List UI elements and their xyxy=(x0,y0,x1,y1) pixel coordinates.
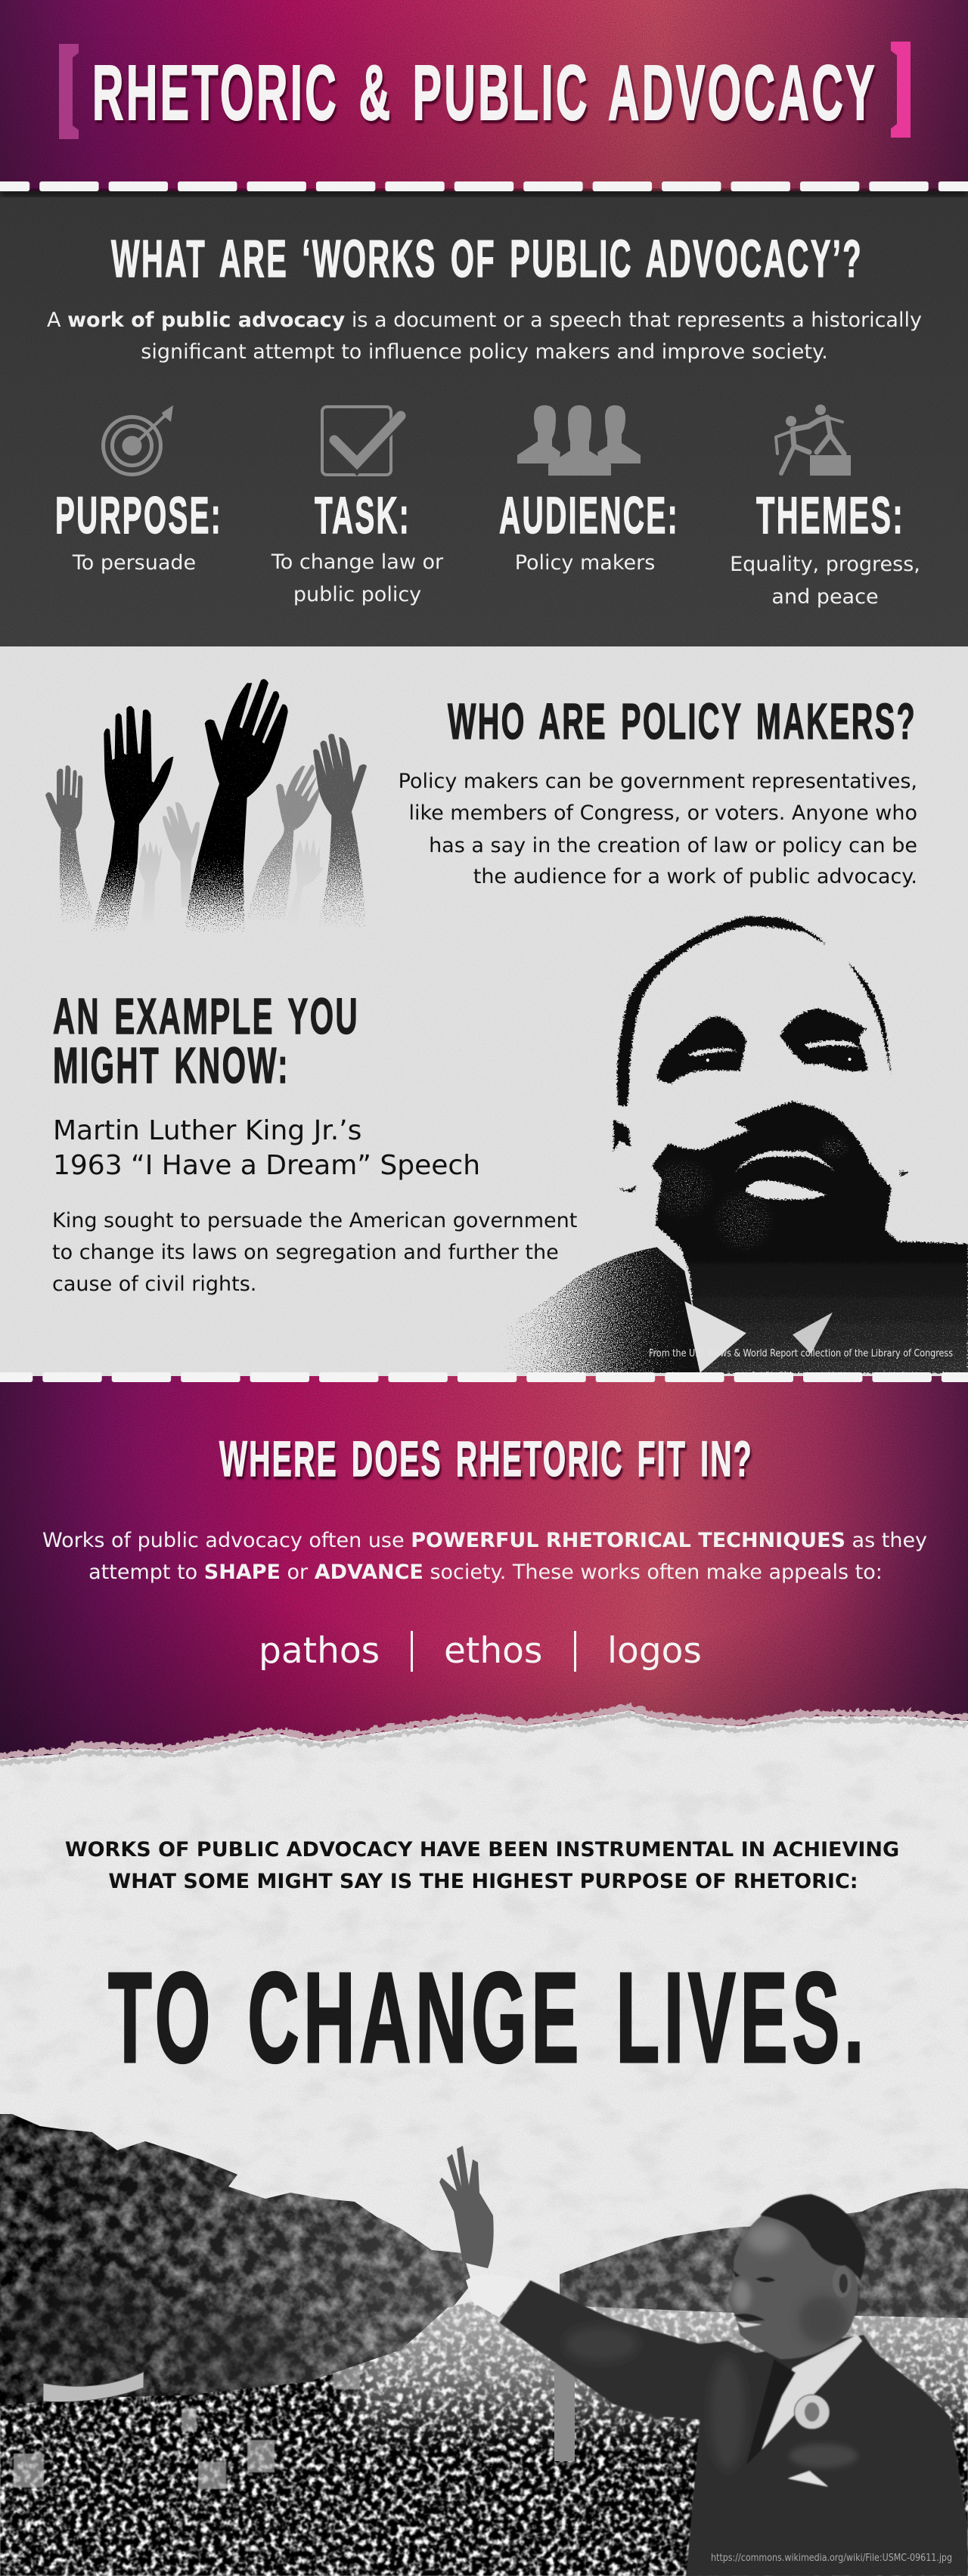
panel: header banner xyxy=(0,0,968,191)
heading: an example you might know: MIGHT KNOW: xyxy=(53,1037,290,1094)
label: purpose: PURPOSE: xyxy=(55,486,222,544)
appeals list: logos xyxy=(607,1630,702,1672)
figure: Dr. King xyxy=(499,2194,968,2576)
paragraph: king example: cause of civil rights. xyxy=(52,1273,256,1296)
panel: who are policy makers and example xyxy=(0,646,968,1380)
paragraph: policy makers: the audience for a work of public advocacy. xyxy=(473,865,917,888)
label: purpose xyxy=(55,486,222,575)
distant hills xyxy=(560,2185,968,2329)
label: themes: Equality, progress, xyxy=(730,553,920,576)
label: themes: and peace xyxy=(771,585,879,609)
subheading: speech name xyxy=(53,1115,480,1181)
paragraph: attempt to SHAPE or ADVANCE society. These works often make appeals to: xyxy=(88,1561,883,1584)
paragraph: Works of public advocacy often use POWERFUL RHETORICAL TECHNIQUES as they xyxy=(42,1529,927,1552)
label: task: TASK: xyxy=(315,486,411,544)
label: purpose: To persuade xyxy=(72,551,196,575)
paragraph xyxy=(42,1529,927,1584)
left bracket xyxy=(59,44,79,139)
intro paragraph: significant attempt to influence policy makers and improve society. xyxy=(141,340,828,364)
paragraph: policy makers xyxy=(399,770,917,888)
torn edge xyxy=(0,1707,968,1763)
statement: WHAT SOME MIGHT SAY IS THE HIGHEST PURPOSE OF RHETORIC: xyxy=(108,1870,858,1893)
right bracket xyxy=(891,42,911,138)
white cuff xyxy=(466,2274,531,2317)
paragraph: king example xyxy=(52,1209,577,1296)
panel: dashed divider top xyxy=(0,181,968,191)
protest signs xyxy=(14,2367,360,2489)
statement xyxy=(65,1838,899,1893)
heading: an example you might know xyxy=(53,988,359,1094)
photo: march on Washington crowd and Dr. King waving xyxy=(0,2109,968,2576)
label: audience: AUDIENCE: xyxy=(499,486,679,544)
label: task: To change law or xyxy=(271,550,444,574)
statement: WORKS OF PUBLIC ADVOCACY HAVE BEEN INSTRUMENTAL IN ACHIEVING xyxy=(65,1838,899,1861)
banner xyxy=(43,2372,144,2402)
paragraph: policy makers: has a say in the creation of law or policy can be xyxy=(429,834,917,857)
panel: what are works of public advocacy xyxy=(0,189,968,646)
paragraph: king example: to change its laws on segregation and further the xyxy=(52,1241,559,1264)
appeals list xyxy=(259,1630,702,1672)
paragraph: king example: King sought to persuade the American government xyxy=(52,1209,577,1232)
trees xyxy=(0,2109,484,2419)
appeals list: ethos xyxy=(444,1630,542,1672)
intro paragraph xyxy=(47,308,922,364)
paragraph: policy makers: Policy makers can be government representatives, xyxy=(399,770,917,793)
subheading: speech name: Martin Luther King Jr.’s xyxy=(53,1115,361,1146)
subheading: speech name: 1963 “I Have a Dream” Speech xyxy=(53,1150,480,1181)
raised hand xyxy=(439,2146,494,2268)
paragraph: policy makers: like members of Congress, or voters. Anyone who xyxy=(408,801,917,825)
label: audience: Policy makers xyxy=(515,551,655,575)
icon: people helping climb xyxy=(776,405,851,476)
appeals list: pathos xyxy=(259,1630,380,1672)
label: task: public policy xyxy=(293,583,421,606)
label: task xyxy=(271,486,444,606)
label: audience xyxy=(499,486,679,575)
crowd xyxy=(0,2291,968,2576)
stage pole xyxy=(554,2365,575,2461)
panel: torn paper and closing statement xyxy=(0,1703,968,2305)
heading: an example you might know: AN EXAMPLE YOU xyxy=(53,988,359,1045)
illustration: raised hands xyxy=(45,679,367,932)
panel: where does rhetoric fit in xyxy=(0,1376,968,1777)
icon: check box xyxy=(322,407,401,475)
label: themes xyxy=(730,486,920,609)
panel: dashed divider middle xyxy=(0,1372,968,1382)
intro paragraph: A work of public advocacy is a document or a speech that represents a historically xyxy=(47,308,922,332)
icon: audience silhouettes xyxy=(517,405,641,476)
illustration: portrait of Martin Luther King Jr. xyxy=(502,916,968,1373)
icon: target with arrow xyxy=(103,405,173,475)
